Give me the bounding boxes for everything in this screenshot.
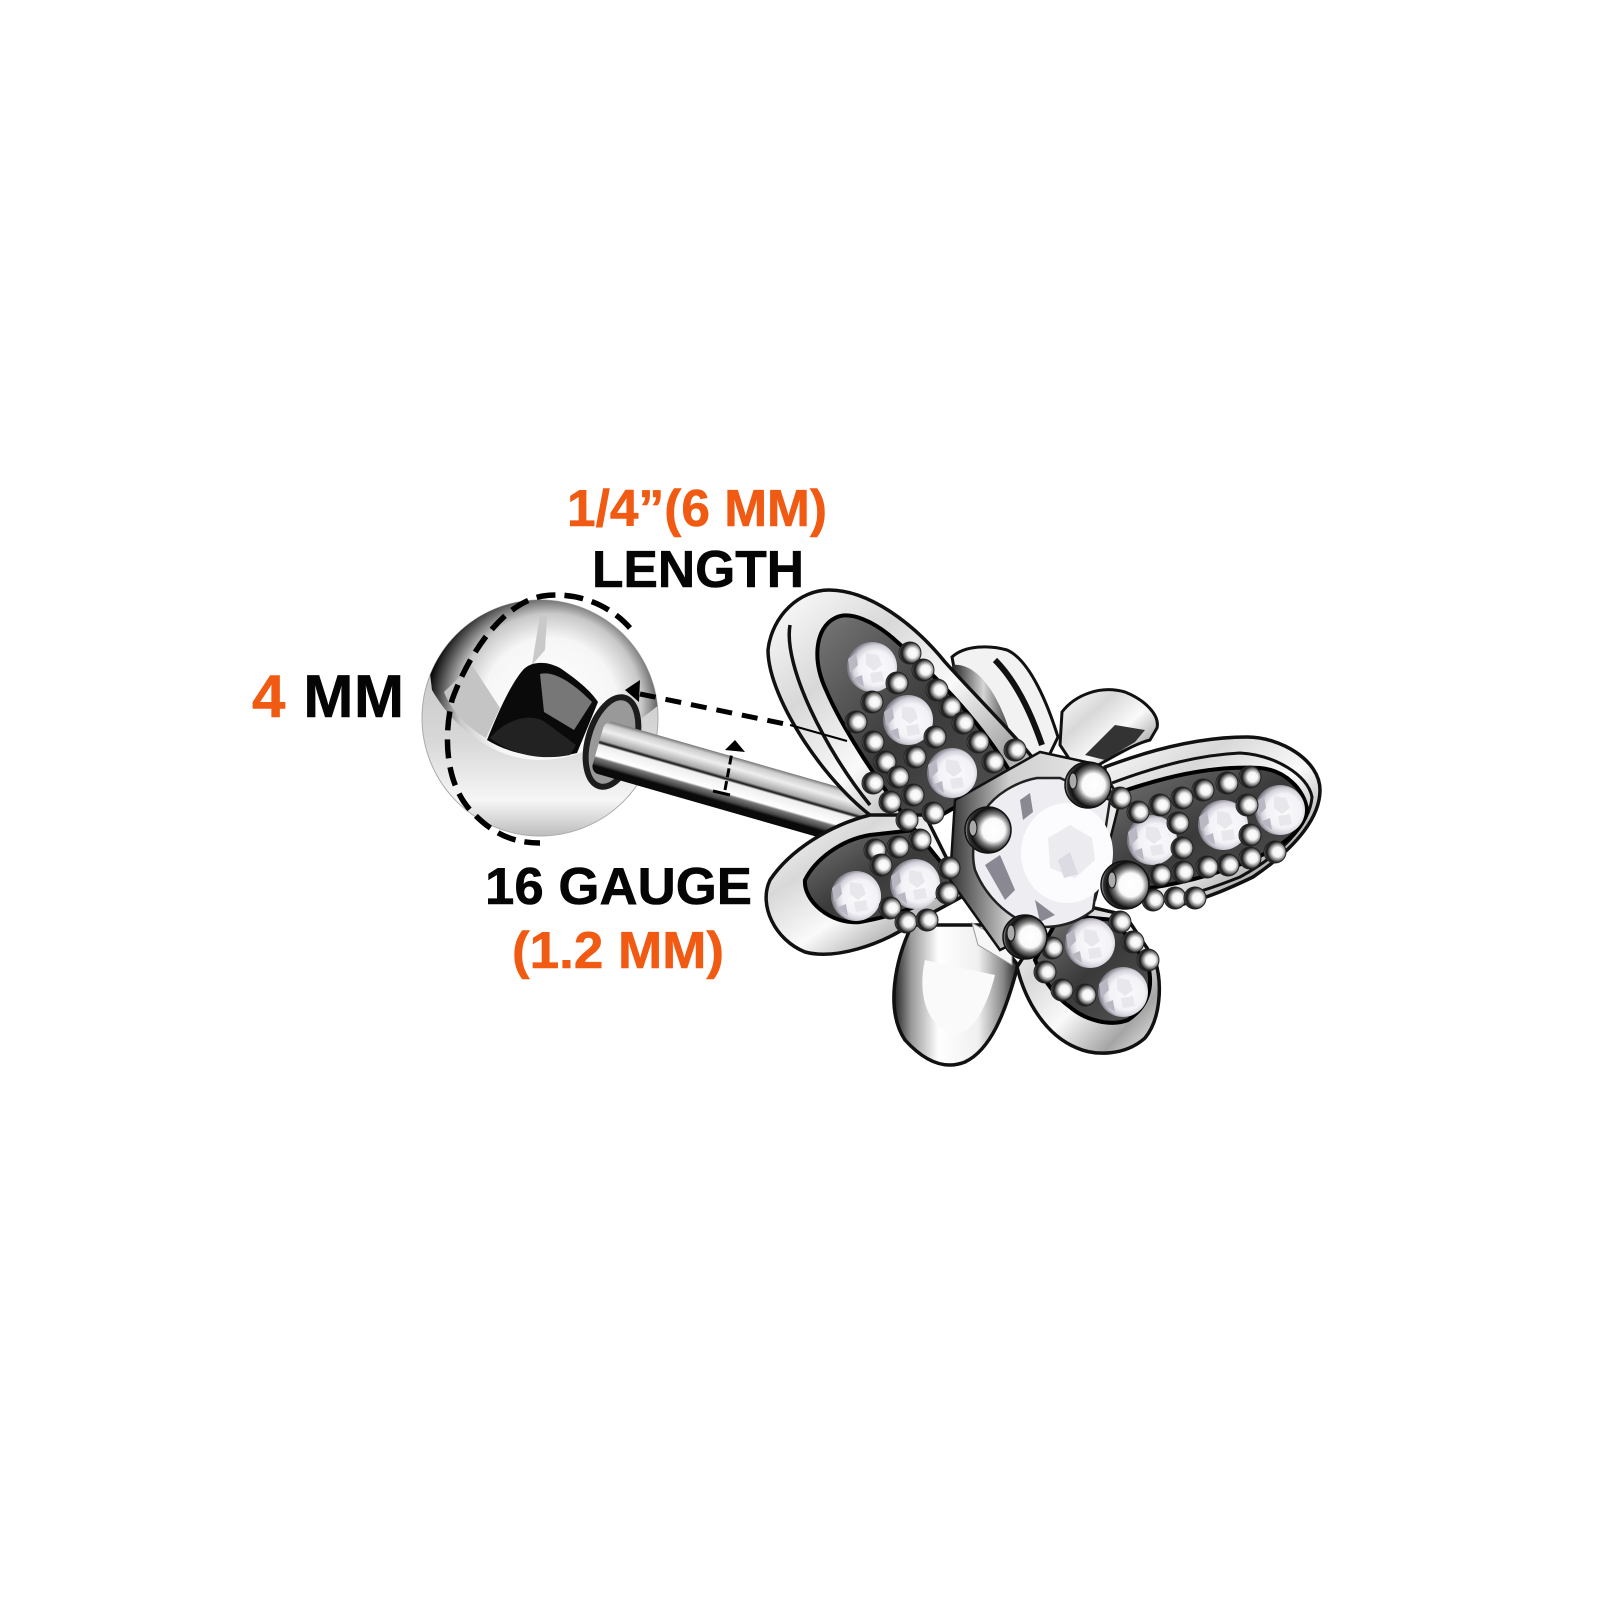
infographic: barbell with butterfly top and dimensions: [252, 488, 1322, 1067]
label: gauge: 16 GAUGE: [485, 858, 752, 916]
wing: right: [1100, 737, 1320, 905]
back wing right: [1060, 690, 1157, 775]
label: length: LENGTH: [592, 541, 804, 599]
back wing top: [952, 647, 1058, 770]
wing: top left: [768, 590, 1032, 830]
plain bottom wing: [894, 923, 1018, 1065]
label: gauge value: (1.2 MM): [512, 922, 724, 980]
ball end of barbell: [420, 590, 665, 836]
dashed ball diameter arc: [447, 595, 630, 843]
wing: bottom right: [1017, 900, 1159, 1053]
prongs: [965, 762, 1149, 959]
centre gem: [1021, 803, 1113, 903]
length arrow: [625, 680, 847, 741]
marquise gem behind centre: [973, 778, 1110, 927]
barbell stem with collar: [576, 691, 884, 852]
small gems: [831, 642, 1305, 1017]
body bar: [950, 752, 1120, 950]
gauge arrow: [713, 740, 745, 795]
label: length value: 1/4”(6 MM): [567, 480, 827, 538]
wing: lower left: [766, 815, 965, 954]
label: ball size: 4 MM: [252, 663, 404, 730]
beads: [845, 642, 1286, 1006]
